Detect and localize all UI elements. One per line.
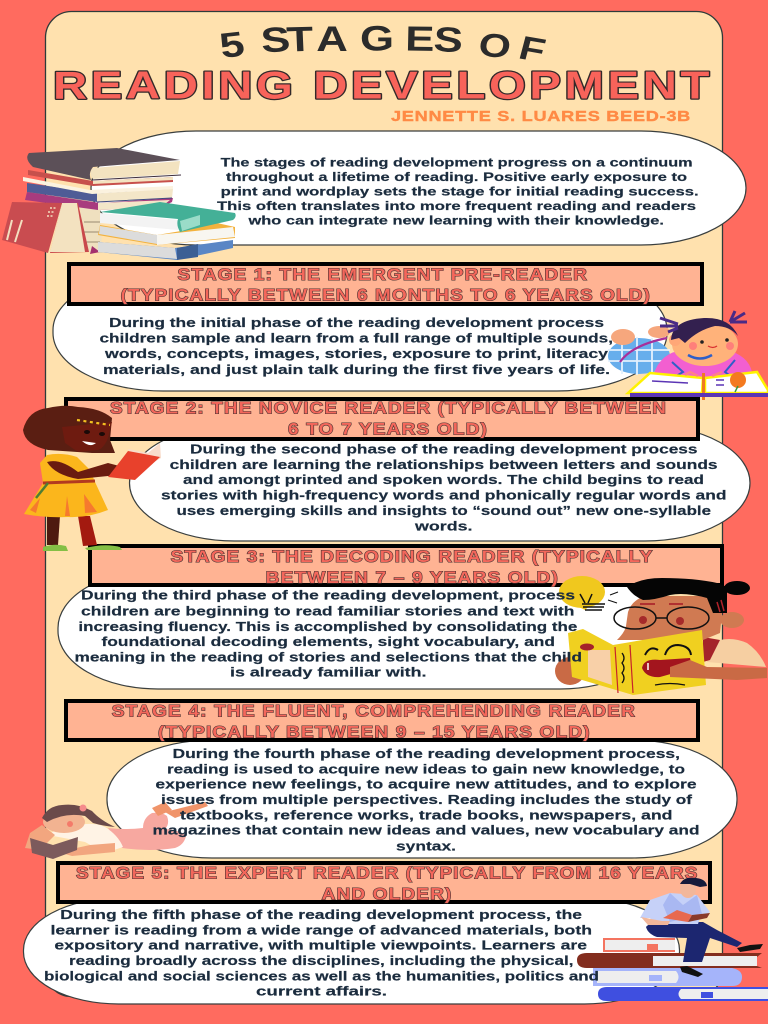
text: stage 1 description: materials, and just plain talk during the first five years of life.	[103, 362, 610, 377]
text: stage 5 description: expository and narrative, with multiple viewpoints. Learners are	[54, 938, 587, 952]
text: stage 5 description: reading broadly across the disciplines, including the physical,	[69, 953, 574, 968]
intro bubble	[91, 131, 746, 245]
title: 5 stages of: STAGES	[259, 20, 464, 60]
text: stage 2 description: stories with high-frequency words and phonically regular words and	[161, 488, 726, 502]
text: stage 3 description: meaning in the reading of stories and selections that the child	[74, 650, 582, 664]
stage 1 panel: STAGE 1: THE EMERGENT PRE-READER	[178, 266, 588, 284]
stage 1 panel: (TYPICALLY BETWEEN 6 MONTHS TO 6 YEARS OLD)	[121, 287, 651, 305]
text: stage 2 description	[161, 442, 726, 534]
text: intro: print and wordplay sets the stage for initial reading success.	[221, 185, 699, 199]
text: stage 4 description: issues from multiple perspectives. Reading includes the study of	[161, 792, 693, 807]
text: intro	[217, 156, 699, 228]
stage 5 panel: STAGE 5: THE EXPERT READER (TYPICALLY FROM 16 YEARS	[76, 864, 698, 882]
text: stage 4 description: During the fourth phase of the reading development process,	[172, 746, 680, 761]
stage 2 panel	[66, 399, 750, 541]
text: stage 2 description: words.	[414, 518, 472, 534]
text: stage 3 description: increasing fluency. This is accomplished by consolidating the	[78, 619, 577, 634]
text: stage 5 description: biological and social sciences as well as the humanities, politics and	[44, 968, 599, 984]
title: 5 stages of: 5	[217, 25, 247, 66]
stage 3 panel	[58, 546, 722, 689]
icon: man sitting on books	[577, 878, 768, 1001]
icon: child reading with globe	[608, 311, 768, 400]
stage 2 panel: STAGE 2: THE NOVICE READER (TYPICALLY BETWEEN	[110, 400, 667, 418]
text: stage 1 description	[100, 315, 613, 377]
text: intro: throughout a lifetime of reading. Positive early exposure to	[226, 170, 688, 184]
stage 5 panel	[24, 863, 710, 1004]
stage 2 panel: 6 TO 7 YEARS OLD)	[288, 420, 488, 438]
text: stage 3 description: children are beginning to read familiar stories and text with	[81, 604, 574, 618]
text: stage 4 description	[152, 746, 700, 854]
text: intro: The stages of reading development progress on a continuum	[221, 156, 693, 170]
title: reading development: READING DEVELOPMENT	[53, 64, 713, 108]
text: stage 5 description: learner is reading from a wide range of advanced materials, both	[50, 922, 592, 938]
text: stage 4 description: textbooks, reference works, trade books, newspapers, and	[180, 808, 672, 822]
text: stage 5 description	[44, 907, 599, 998]
icon: girl reading red book	[23, 406, 161, 551]
stage 4 panel	[66, 701, 737, 858]
stage 1 panel	[53, 264, 702, 391]
author line: JENNETTE S. LUARES BEED-3B	[391, 108, 691, 125]
text: stage 3 description: During the third phase of the reading development, process	[81, 588, 575, 602]
text: stage 1 description: During the initial phase of the reading development process	[109, 315, 604, 330]
text: stage 3 description: foundational decoding elements, sight vocabulary, and	[102, 634, 555, 649]
text: stage 2 description: During the second phase of the reading development process	[190, 442, 698, 456]
stage 3 panel: BETWEEN 7 – 9 YEARS OLD)	[266, 569, 559, 587]
stage 4 panel: (TYPICALLY BETWEEN 9 – 15 YEARS OLD)	[158, 723, 591, 741]
text: stage 2 description: children are learning the relationships between letters and sounds	[170, 457, 718, 472]
stage 5 panel: AND OLDER)	[322, 885, 452, 903]
icon: stack of books	[2, 148, 236, 260]
title: 5 stages of: OF	[476, 25, 549, 69]
title: 5 stages of	[217, 20, 549, 69]
text: intro: who can integrate new learning with their knowledge.	[247, 214, 664, 228]
stage 4 panel: STAGE 4: THE FLUENT, COMPREHENDING READER	[112, 703, 636, 721]
text: stage 1 description: words, concepts, images, stories, exposure to print, literacy	[104, 346, 609, 361]
text: intro: This often translates into more frequent reading and readers	[217, 199, 696, 213]
icon: girl lying down reading	[25, 802, 208, 859]
stage 3 panel: STAGE 3: THE DECODING READER (TYPICALLY	[171, 548, 653, 566]
text: stage 2 description: uses emerging skills and insights to “sound out” new one-syllable	[176, 503, 711, 518]
text: stage 3 description: is already familiar with.	[230, 664, 426, 680]
text: stage 1 description: children sample and learn from a full range of multiple sounds,	[100, 330, 613, 346]
text: stage 4 description: syntax.	[396, 838, 456, 854]
text: stage 3 description	[74, 588, 582, 680]
text: stage 4 description: magazines that contain new ideas and values, new vocabulary and	[152, 822, 700, 838]
text: stage 4 description: reading is used to acquire new ideas to gain new knowledge, to	[167, 762, 685, 776]
icon: lightbulb and boy reading	[555, 576, 767, 695]
text: stage 4 description: experience new feelings, to acquire new attitudes, and to explore	[155, 776, 697, 792]
text: stage 5 description: During the fifth phase of the reading development process, the	[60, 907, 582, 922]
text: stage 5 description: current affairs.	[256, 984, 387, 998]
text: stage 2 description: and amongt printed and spoken words. The child begins to read	[183, 472, 704, 487]
